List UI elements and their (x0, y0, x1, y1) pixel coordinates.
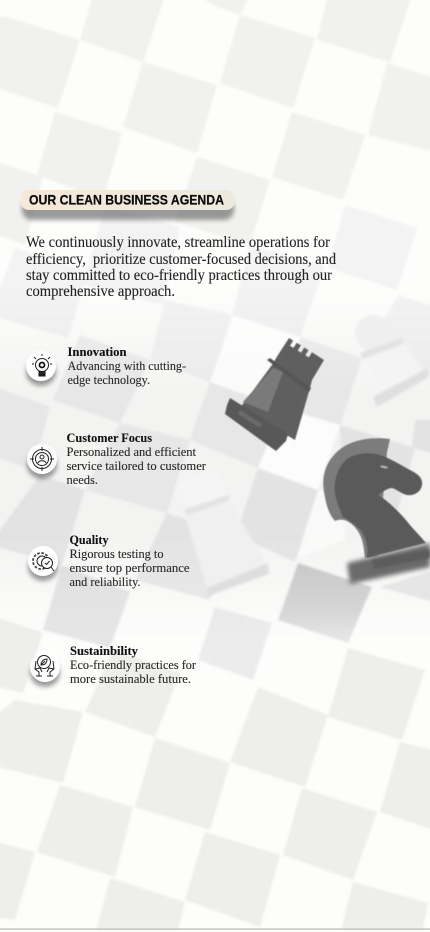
chess piece: knight (323, 438, 430, 584)
chess piece: left white pawn (175, 470, 269, 596)
text: innovation: edge technology. (68, 373, 150, 387)
intro paragraph: stay committed to eco-friendly practices through our (26, 267, 333, 284)
title: OUR CLEAN BUSINESS AGENDA (29, 192, 224, 208)
text: customer focus (66, 431, 207, 487)
text: customer focus: service tailored to customer (66, 459, 207, 473)
text: sustainability: more sustainable future. (70, 672, 191, 686)
text: customer focus: needs. (66, 473, 98, 487)
intro paragraph (26, 234, 336, 300)
text: innovation: Innovation (68, 345, 126, 359)
text: quality: and reliability. (70, 575, 140, 589)
icon: customer focus target (27, 444, 57, 479)
text: sustainability (70, 644, 197, 686)
text: sustainability: Sustainbility (70, 644, 139, 658)
title pill (20, 190, 235, 220)
text: customer focus: Personalized and efficient (66, 445, 196, 459)
bottom rule (0, 928, 430, 930)
text: customer focus: Customer Focus (66, 431, 152, 445)
chess piece: right white pawn (355, 315, 428, 407)
text: innovation: Advancing with cutting- (68, 359, 186, 373)
intro paragraph: We continuously innovate, streamline operations for (26, 234, 331, 251)
intro paragraph: comprehensive approach. (26, 283, 175, 300)
text: quality: ensure top performance (70, 561, 190, 575)
intro paragraph: efficiency, prioritize customer-focused decisions, and (26, 251, 336, 268)
text: quality: Rigorous testing to (70, 547, 164, 561)
icon: innovation lightbulb (26, 351, 56, 386)
icon: sustainability hands and leaf (30, 652, 60, 687)
chess piece: rook (225, 338, 324, 451)
text: quality: Quality (70, 533, 109, 547)
text: sustainability: Eco-friendly practices for (70, 658, 197, 672)
text: innovation (68, 345, 186, 387)
text: quality (70, 533, 190, 589)
icon: quality gear and magnifier (28, 546, 58, 581)
